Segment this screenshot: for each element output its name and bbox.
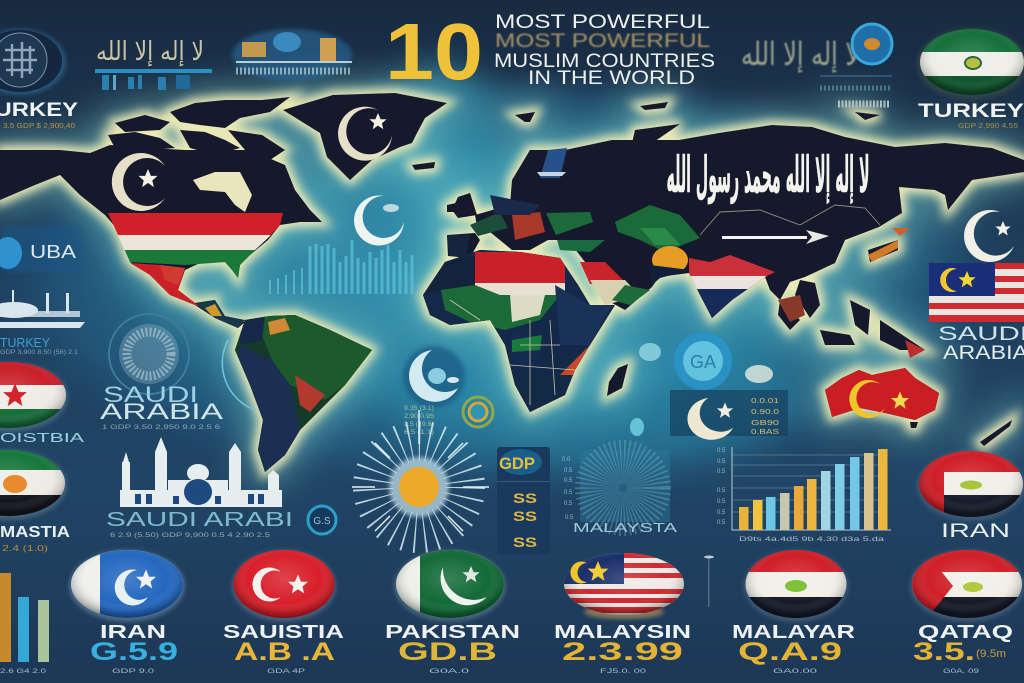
- title line 4: IN THE WORLD: [528, 68, 695, 89]
- small crescent over Atlantic: [354, 196, 404, 246]
- Europe coloured countries: [540, 148, 567, 178]
- blue round emblem: [674, 332, 732, 390]
- GDP growth bar chart: 0.5: [717, 448, 726, 454]
- flag sphere: [740, 548, 852, 622]
- GDP growth bar chart: 0.5: [717, 499, 726, 505]
- small data list: 9.35 (3.1): [404, 405, 434, 412]
- India stripes: [689, 255, 775, 318]
- flag sphere: [392, 548, 506, 622]
- top right flag sphere: [915, 28, 1024, 100]
- Saudi caption: 1 GDP 3.50 2,950 9.0 2.5 6: [102, 425, 221, 431]
- flag sphere: [910, 548, 1024, 622]
- Malaysia label: MALAYSTA: [573, 520, 677, 535]
- land masses: [0, 93, 1024, 472]
- Arabia and Iran: [580, 262, 625, 284]
- value: 2.3.99: [562, 638, 683, 666]
- value: Q.A.9: [738, 638, 842, 666]
- caption: GDP 9.0: [112, 668, 155, 675]
- Malaysia sunburst panel: 0.5: [564, 490, 573, 496]
- top calligraphy panel left: [95, 37, 212, 90]
- Malaysia flag panel: [929, 263, 1024, 322]
- top right caption: GDP 2,990 4.55: [958, 123, 1018, 130]
- bottom card: Pakistan: [385, 548, 520, 675]
- Malaysia sunburst panel: 0.5: [564, 468, 573, 474]
- South America: [235, 315, 372, 472]
- right crescent and star: [964, 210, 1014, 262]
- world map: [0, 93, 1024, 480]
- top left caption: 3.5 GDP $ 2,900,40: [3, 123, 75, 130]
- chart axis labels: D9ts 4a.4d5 9b 4.30 d3a 5.da: [739, 536, 885, 543]
- left label 1: OISTBIA: [0, 430, 85, 445]
- top mosaic skyline panel: [232, 29, 352, 81]
- caption: GDA 4P: [267, 668, 305, 675]
- coastal glow around the world map: [0, 93, 1024, 472]
- crescent data panel: [670, 390, 788, 440]
- GDP growth bar chart: 0.5: [717, 459, 726, 465]
- Saudi label 1: SAUDI: [103, 382, 198, 407]
- Malaysia sunburst panel: [562, 450, 677, 535]
- antenna marker: [704, 556, 714, 607]
- flag sphere: [230, 548, 340, 622]
- left flag sphere 1: [0, 360, 70, 432]
- crescent data panel: 0.90.0: [751, 407, 779, 416]
- crescent data panel: GB90: [751, 418, 779, 427]
- GDP panel: [497, 447, 550, 555]
- mosque label: SAUDI ARABI: [106, 509, 293, 531]
- left caption 2: 2.4 (1.0): [2, 544, 49, 553]
- left mosque panel: [0, 290, 85, 328]
- right label Saudi: SAUDI: [938, 324, 1024, 345]
- GDP panel: SS: [513, 534, 537, 550]
- round badge: [308, 506, 336, 534]
- top calligraphy panel left: لا إله إلا الله: [96, 37, 204, 67]
- sun burst icon: [352, 410, 489, 533]
- chart caption: 2.6 G4 2.0: [0, 669, 47, 675]
- Greenland crescent and star: [338, 107, 392, 161]
- left Cuba badge: UBA: [30, 242, 76, 262]
- flag sphere: [560, 550, 690, 620]
- left blue label: TURKEY: [0, 335, 50, 350]
- small data list: 6.5 (1.1): [404, 429, 434, 436]
- Central Asia green: [615, 205, 700, 252]
- Malaysia sunburst panel: 0.5: [564, 478, 573, 484]
- country name: PAKISTAN: [385, 622, 520, 642]
- Africa: [420, 250, 620, 420]
- Russia-China border line: [700, 205, 880, 235]
- title number: 10: [385, 7, 483, 96]
- ring icon: [463, 397, 493, 427]
- bottom card: Sauistia: [223, 548, 344, 675]
- bottom card: Malayar: [732, 548, 855, 675]
- bottom left mini bar chart: [0, 573, 49, 675]
- right label Iran: IRAN: [941, 521, 1010, 542]
- Australia with crescent: [825, 368, 939, 420]
- value: 3.5.: [913, 638, 975, 666]
- Hudson Bay: [193, 172, 252, 212]
- GDP panel: SS: [513, 490, 537, 506]
- North America flag stripes: [108, 213, 283, 278]
- value: GD.B: [398, 638, 497, 666]
- small value note: (9.5m: [976, 648, 1006, 660]
- country name: SAUISTIA: [223, 622, 344, 642]
- South-east Asia accent: [778, 295, 805, 322]
- GDP growth bar chart: 0.5: [717, 469, 726, 475]
- crescent emblem over Atlantic: [403, 346, 465, 408]
- crescent data panel: 0.0.01: [751, 396, 779, 405]
- round badge: G.S: [313, 516, 331, 527]
- country name: QATAQ: [918, 622, 1013, 642]
- top right calligraphy panel: لا إله إلا الله: [741, 35, 859, 73]
- small data list: [404, 405, 434, 436]
- Saudi Arabia circular emblem: [109, 314, 255, 410]
- country name: MALAYAR: [732, 622, 855, 642]
- GDP growth bar chart: 0.5: [717, 520, 726, 526]
- top right calligraphy panel: [741, 24, 892, 104]
- arc around South America: [222, 340, 255, 410]
- country name: IRAN: [100, 622, 166, 642]
- Indian Ocean emblems: GA: [690, 352, 716, 372]
- Canada crescent and star: [112, 153, 165, 211]
- GDP panel: SS: [513, 508, 537, 524]
- flag sphere: [69, 548, 185, 622]
- ocean glow: [0, 60, 1020, 495]
- mosque caption: 6 2.9 (5.50) GDP 9,900 0.5 4 2.90 2.5: [110, 532, 271, 539]
- value: G.5.9: [90, 638, 178, 666]
- Malaysia sunburst panel: 0.5: [565, 515, 574, 521]
- crescent data panel: 0.BAS: [751, 427, 779, 436]
- caption: GA0.00: [773, 668, 818, 675]
- Mexico: [130, 263, 215, 310]
- title line 3: MUSLIM COUNTRIES: [494, 51, 715, 72]
- GDP growth bar chart: [717, 447, 891, 543]
- round emblem: [852, 24, 892, 64]
- title line 1: MOST POWERFUL: [495, 12, 710, 33]
- left flag sphere 2: [0, 448, 70, 520]
- Malaysia sunburst panel: 0.5: [564, 501, 573, 507]
- shell: [745, 365, 773, 383]
- caption: FJ5.0. 00: [600, 668, 647, 675]
- arrow across China: [722, 230, 829, 244]
- Indian Ocean emblems: [630, 332, 773, 436]
- left Cuba badge: [0, 226, 82, 272]
- top left globe badge: [0, 29, 66, 95]
- small data list: 2.5 (19.6): [404, 421, 434, 428]
- GDP growth bar chart: 0.5: [717, 510, 726, 516]
- Atlantic bar chart: [270, 240, 412, 294]
- country name: MALAYSIN: [554, 622, 691, 642]
- value: A.B .A: [234, 638, 335, 666]
- small data list: 2.90 0.95: [404, 413, 434, 420]
- Japan: [868, 240, 898, 262]
- caption: G0A. 09: [943, 668, 980, 675]
- title: [385, 7, 715, 96]
- left label 2: MASTIA: [0, 524, 71, 541]
- white mosque illustration: [120, 437, 282, 507]
- Malaysia sunburst panel: 0.0: [562, 457, 571, 463]
- GDP growth bar chart: 0.5: [717, 488, 726, 494]
- Saudi label 2: ARABIA: [100, 399, 223, 424]
- droplet lower: [630, 418, 644, 436]
- droplet: [639, 343, 661, 361]
- right label Arabia: ARABIA: [943, 343, 1024, 364]
- caption: G0A.0: [429, 668, 470, 675]
- bottom card: Iran: [69, 548, 185, 675]
- title line 2: MOST POWERFUL: [495, 31, 710, 52]
- right flag sphere Iran: [915, 448, 1024, 521]
- left small caption: GDP 3,900 8.50 (56) 2.1: [0, 350, 79, 356]
- bottom card: Malaysin: [554, 550, 691, 675]
- bottom card: Qataq: [910, 548, 1024, 675]
- GDP panel: GDP: [499, 454, 535, 473]
- top right label: TURKEY: [918, 101, 1024, 122]
